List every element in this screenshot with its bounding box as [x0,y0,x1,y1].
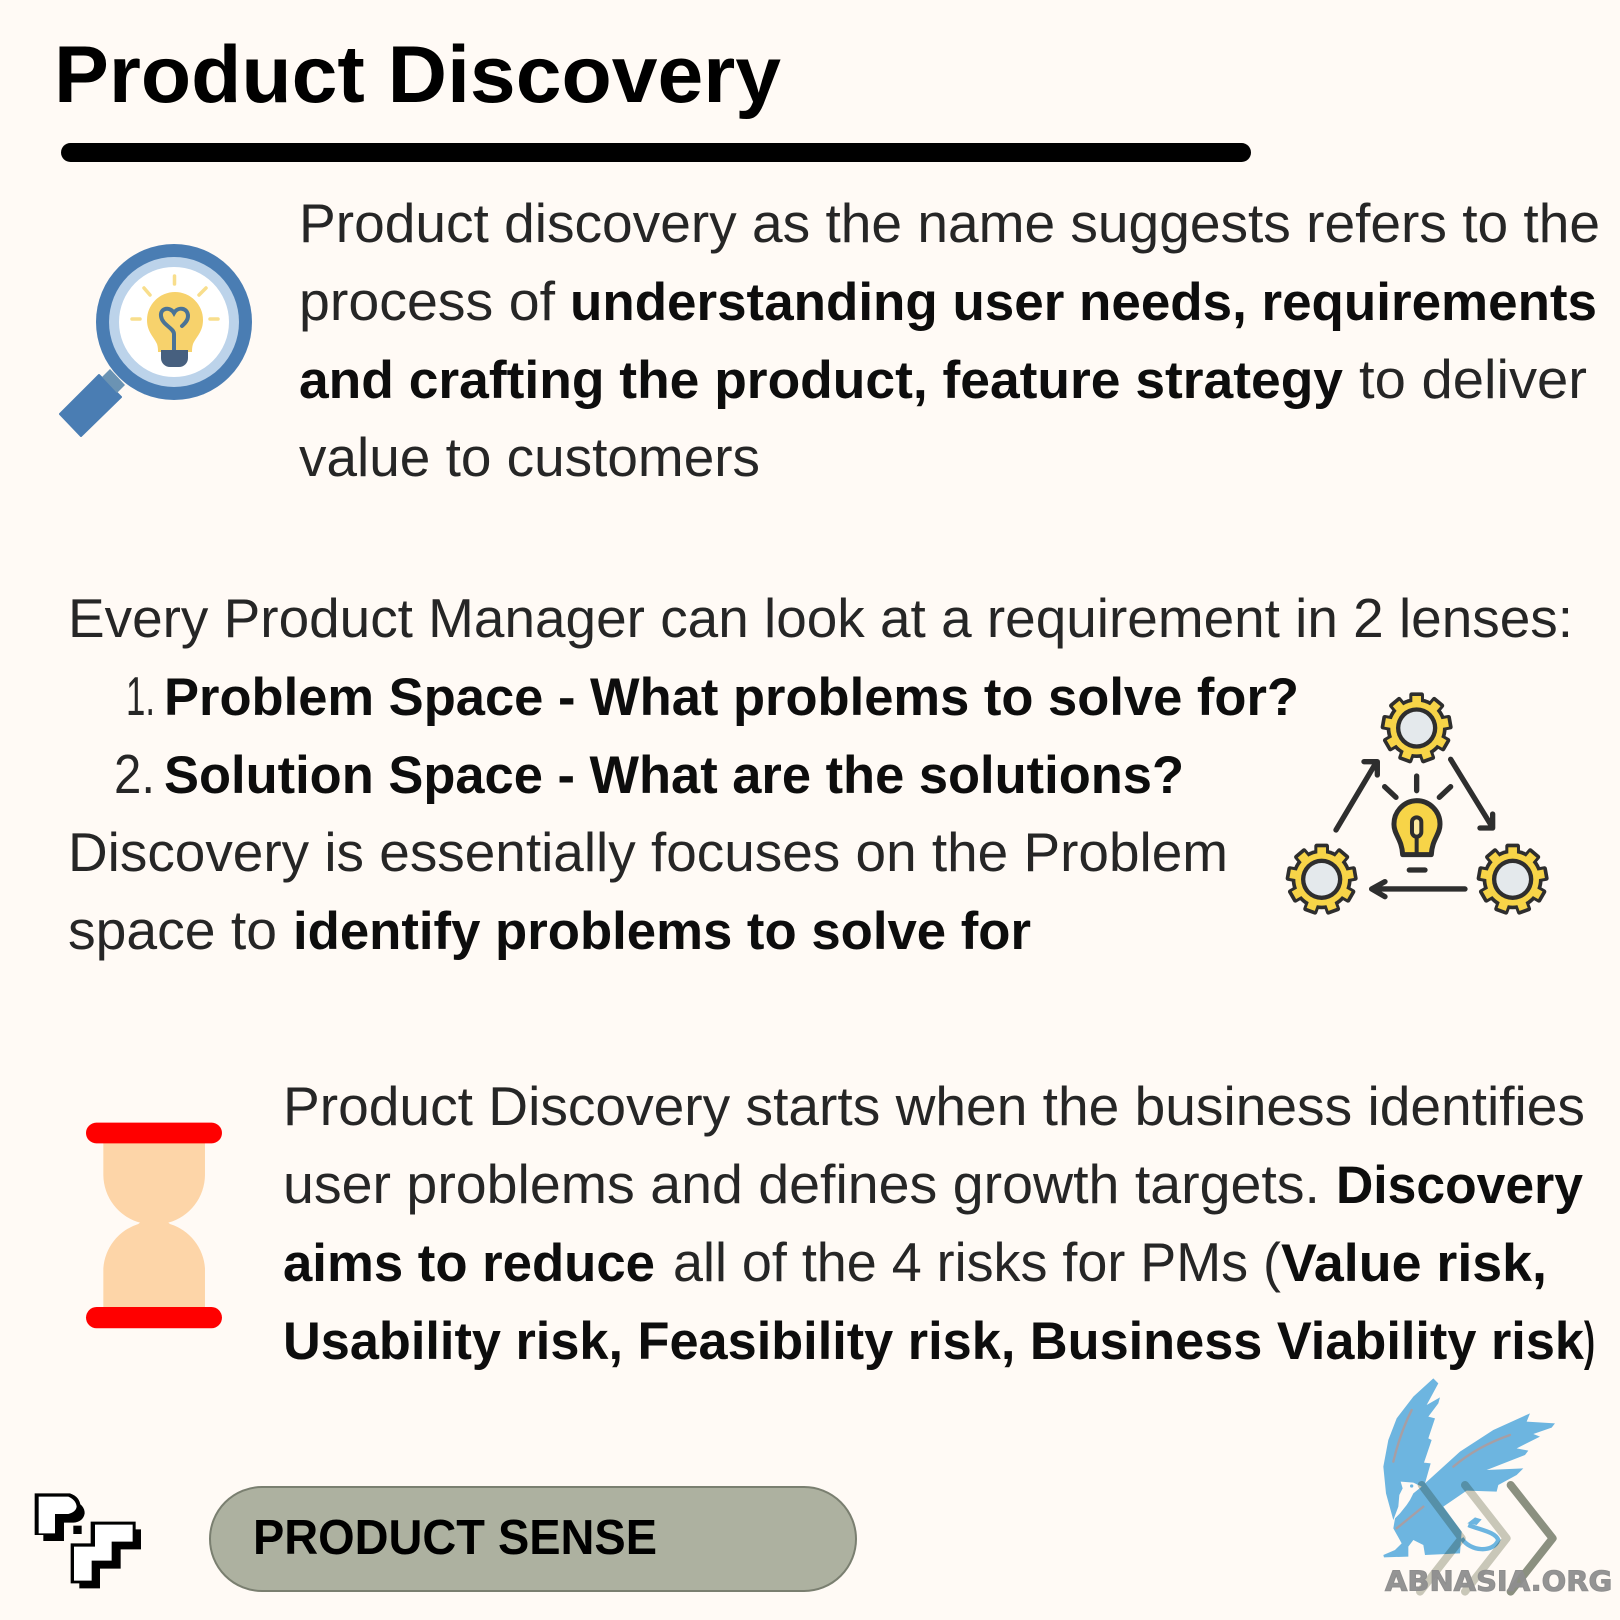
gear: right [1479,846,1546,912]
paragraph: when discovery starts and the 4 risks: Usability risk, Feasibility risk, Business Viability risk [283,1312,1585,1371]
paragraph: two lenses: 2. [114,743,155,805]
paragraph: two lenses: 1. [126,665,155,727]
paragraph: when discovery starts and the 4 risks [283,1075,1595,1371]
paragraph: two lenses: Solution Space - What are the solutions? [164,746,1184,805]
paragraph: two lenses: Problem Space - What problems to solve for? [164,668,1299,727]
paragraph: when discovery starts and the 4 risks: Value risk, [1281,1234,1547,1293]
icon: magnifier with light bulb [60,244,252,436]
pill: product sense: PRODUCT SENSE [253,1511,657,1565]
paragraph: definition of product discovery: understanding user needs, requirements [570,273,1597,332]
paragraph: two lenses: Every Product Manager can look at a requirement in 2 lenses: [68,587,1573,649]
paragraph: when discovery starts and the 4 risks: user problems and defines growth targets. [283,1153,1320,1215]
paragraph: when discovery starts and the 4 risks: Discovery [1336,1156,1584,1215]
paragraph: when discovery starts and the 4 risks: aims to reduce [283,1234,655,1293]
paragraph: two lenses [68,587,1573,961]
title: Product Discovery [54,30,781,120]
light bulb [1385,776,1451,870]
paragraph: definition of product discovery [299,192,1600,488]
gear: left [1288,846,1355,912]
watermark text: ABNASIA.ORG [1385,1564,1612,1597]
paragraph: definition of product discovery: Product discovery as the name suggests refers to the [299,192,1600,254]
arrows between gears [1336,759,1493,897]
watermark: griffin logo with chevrons [1383,1378,1612,1597]
gear: top [1383,695,1450,761]
paragraph: when discovery starts and the 4 risks: Product Discovery starts when the business identifies [283,1075,1585,1137]
paragraph: definition of product discovery: and crafting the product, feature strategy [299,351,1344,410]
chevrons [1420,1485,1553,1592]
icon: gears cycle around light bulb [1288,695,1546,912]
griffin feather lines [1393,1410,1510,1528]
paragraph: two lenses: Discovery is essentially focuses on the Problem [68,821,1228,883]
paragraph: two lenses: identify problems to solve for [293,902,1031,961]
icon: hourglass [86,1123,222,1328]
griffin [1383,1378,1555,1557]
title underline [61,143,1251,162]
paragraph: definition of product discovery: to deliver [1359,348,1587,410]
paragraph: when discovery starts and the 4 risks: ) [1584,1312,1595,1371]
paragraph: when discovery starts and the 4 risks: all of the 4 risks for PMs ( [673,1231,1281,1293]
paragraph: definition of product discovery: value to customers [299,426,760,488]
pill: product sense [210,1487,856,1591]
logo: pixel P mark [35,1493,141,1588]
paragraph: two lenses: space to [68,899,277,961]
paragraph: definition of product discovery: process of [299,270,556,332]
